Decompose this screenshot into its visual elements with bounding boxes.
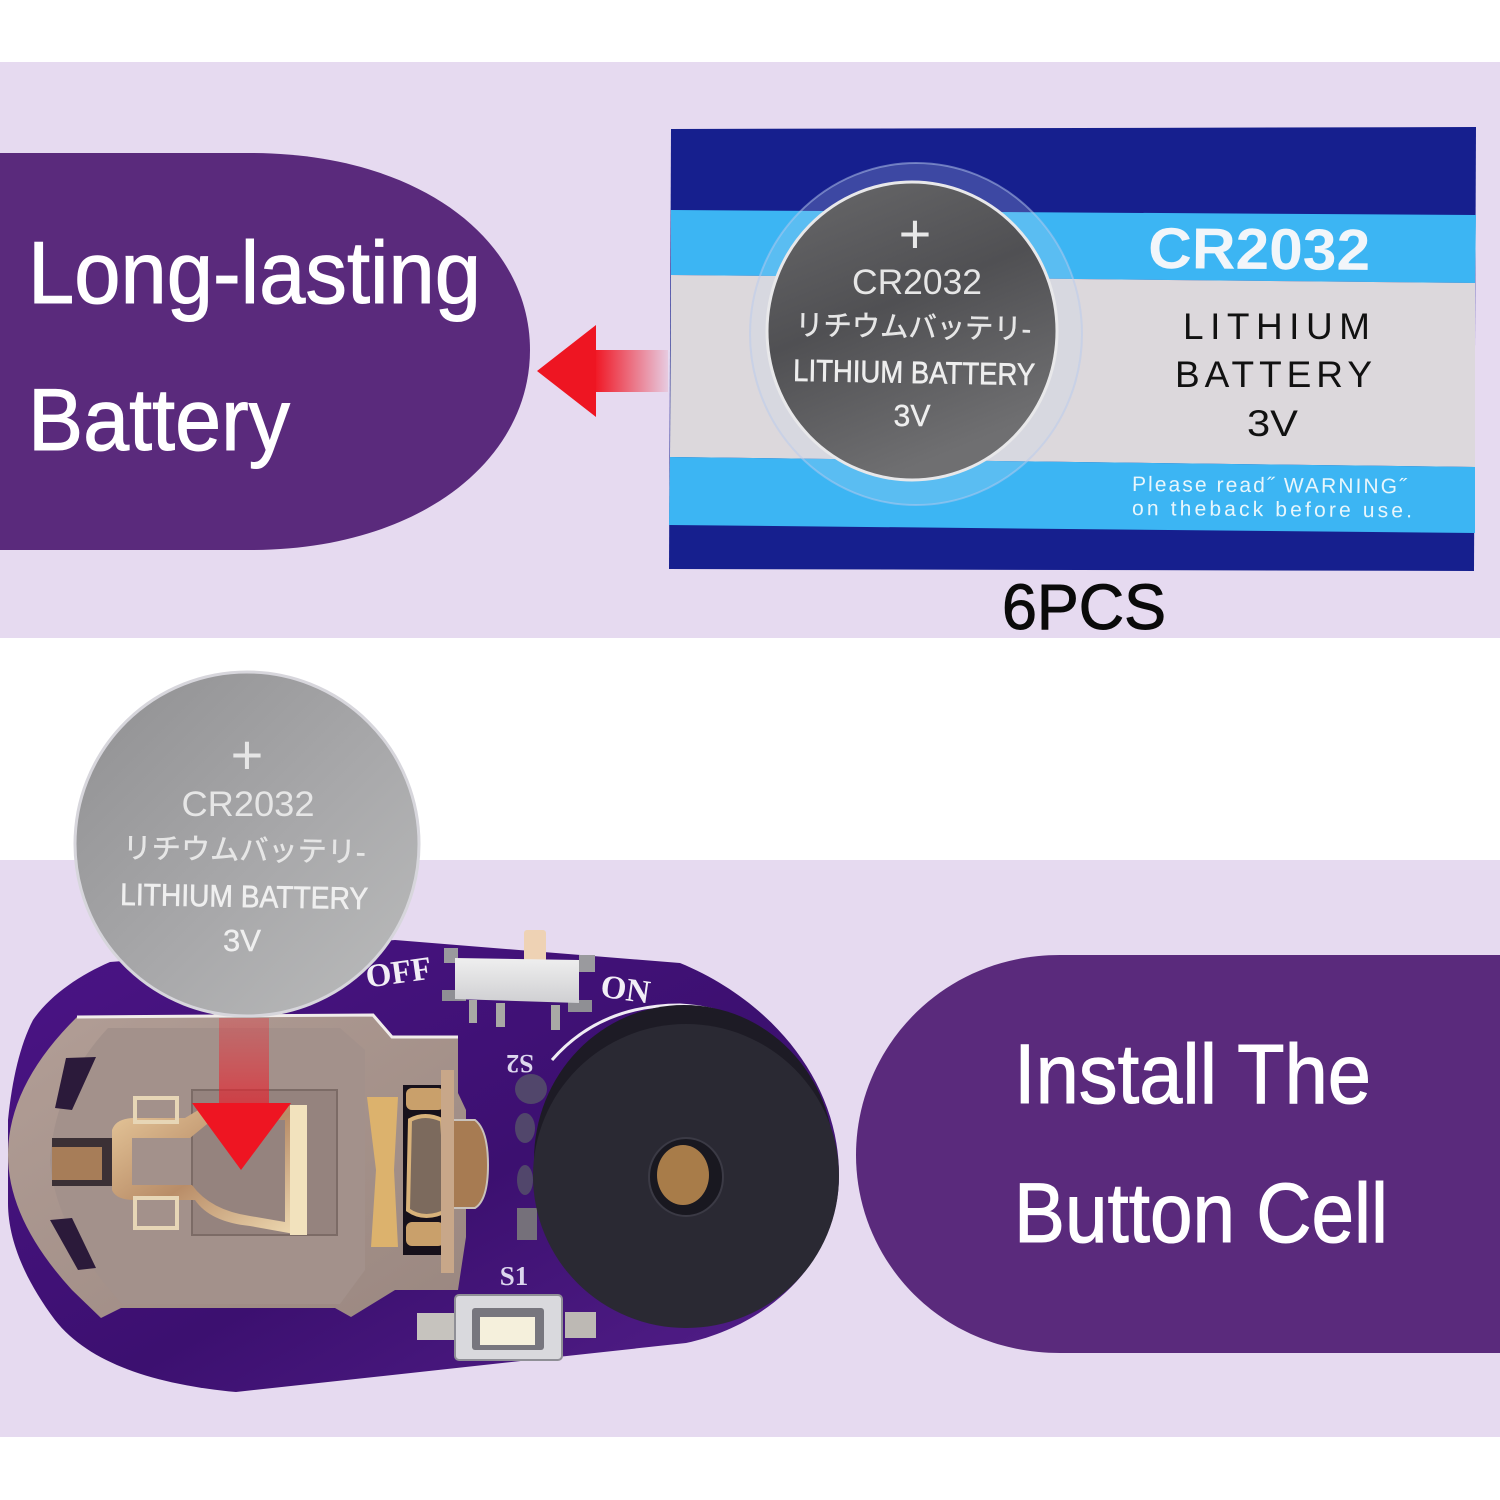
coin cell in blister: CR2032 xyxy=(852,263,982,302)
coin cell in blister: + xyxy=(899,202,931,265)
arrow: pointing left to label xyxy=(537,325,668,417)
panel: long-lasting battery label: Battery xyxy=(28,370,290,469)
side contact xyxy=(367,1097,398,1247)
panel: long-lasting battery label: Long-lasting xyxy=(28,223,481,322)
arrow: pointing down into holder xyxy=(192,1018,291,1170)
through-hole pads xyxy=(515,1074,547,1240)
silk label: S2: S2 xyxy=(506,1049,534,1078)
panel: CR2032 battery card: LITHIUM xyxy=(1183,306,1370,347)
panel: CR2032 battery card: 3V xyxy=(1247,403,1298,444)
slide switch xyxy=(442,930,595,1030)
silk label: ON: ON xyxy=(598,969,653,1011)
coin cell battery being installed: LITHIUM BATTERY xyxy=(120,877,368,916)
panel: long-lasting battery label xyxy=(0,153,530,550)
coin cell battery being installed: リチウムバッテリ- xyxy=(122,833,366,869)
panel: CR2032 battery card: Please read˝ WARNING˝ xyxy=(1132,473,1408,498)
coin cell in blister xyxy=(767,182,1057,480)
silk label: S1: S1 xyxy=(500,1261,528,1291)
coin cell in blister: LITHIUM BATTERY xyxy=(793,353,1035,392)
background band: bottom xyxy=(0,860,1500,1437)
battery holder xyxy=(8,1015,488,1318)
quantity label: 6PCS xyxy=(1002,571,1166,643)
buzzer xyxy=(533,1005,839,1328)
panel: install the button cell label: Install The xyxy=(1014,1027,1371,1121)
coin cell battery being installed: CR2032 xyxy=(182,785,314,824)
coin cell battery being installed: + xyxy=(231,723,263,786)
circuit board with components xyxy=(8,930,839,1392)
panel: install the button cell label xyxy=(856,955,1500,1353)
coin cell in blister: 3V xyxy=(894,398,931,433)
silk label: OFF: OFF xyxy=(363,951,434,996)
panel: CR2032 battery card xyxy=(669,127,1476,571)
panel: CR2032 battery card: CR2032 xyxy=(1148,216,1370,283)
blister pack xyxy=(750,163,1082,505)
coin cell battery being installed xyxy=(75,672,419,1016)
coin cell in blister: リチウムバッテリ- xyxy=(795,310,1031,346)
spring contact xyxy=(112,1106,300,1235)
background band: top xyxy=(0,62,1500,638)
panel: install the button cell label: Button Cell xyxy=(1014,1166,1388,1260)
coin cell battery being installed: 3V xyxy=(223,923,261,958)
panel: CR2032 battery card: on theback before use. xyxy=(1132,497,1412,522)
panel: CR2032 battery card: BATTERY xyxy=(1175,354,1372,395)
push button S1 xyxy=(417,1295,596,1360)
